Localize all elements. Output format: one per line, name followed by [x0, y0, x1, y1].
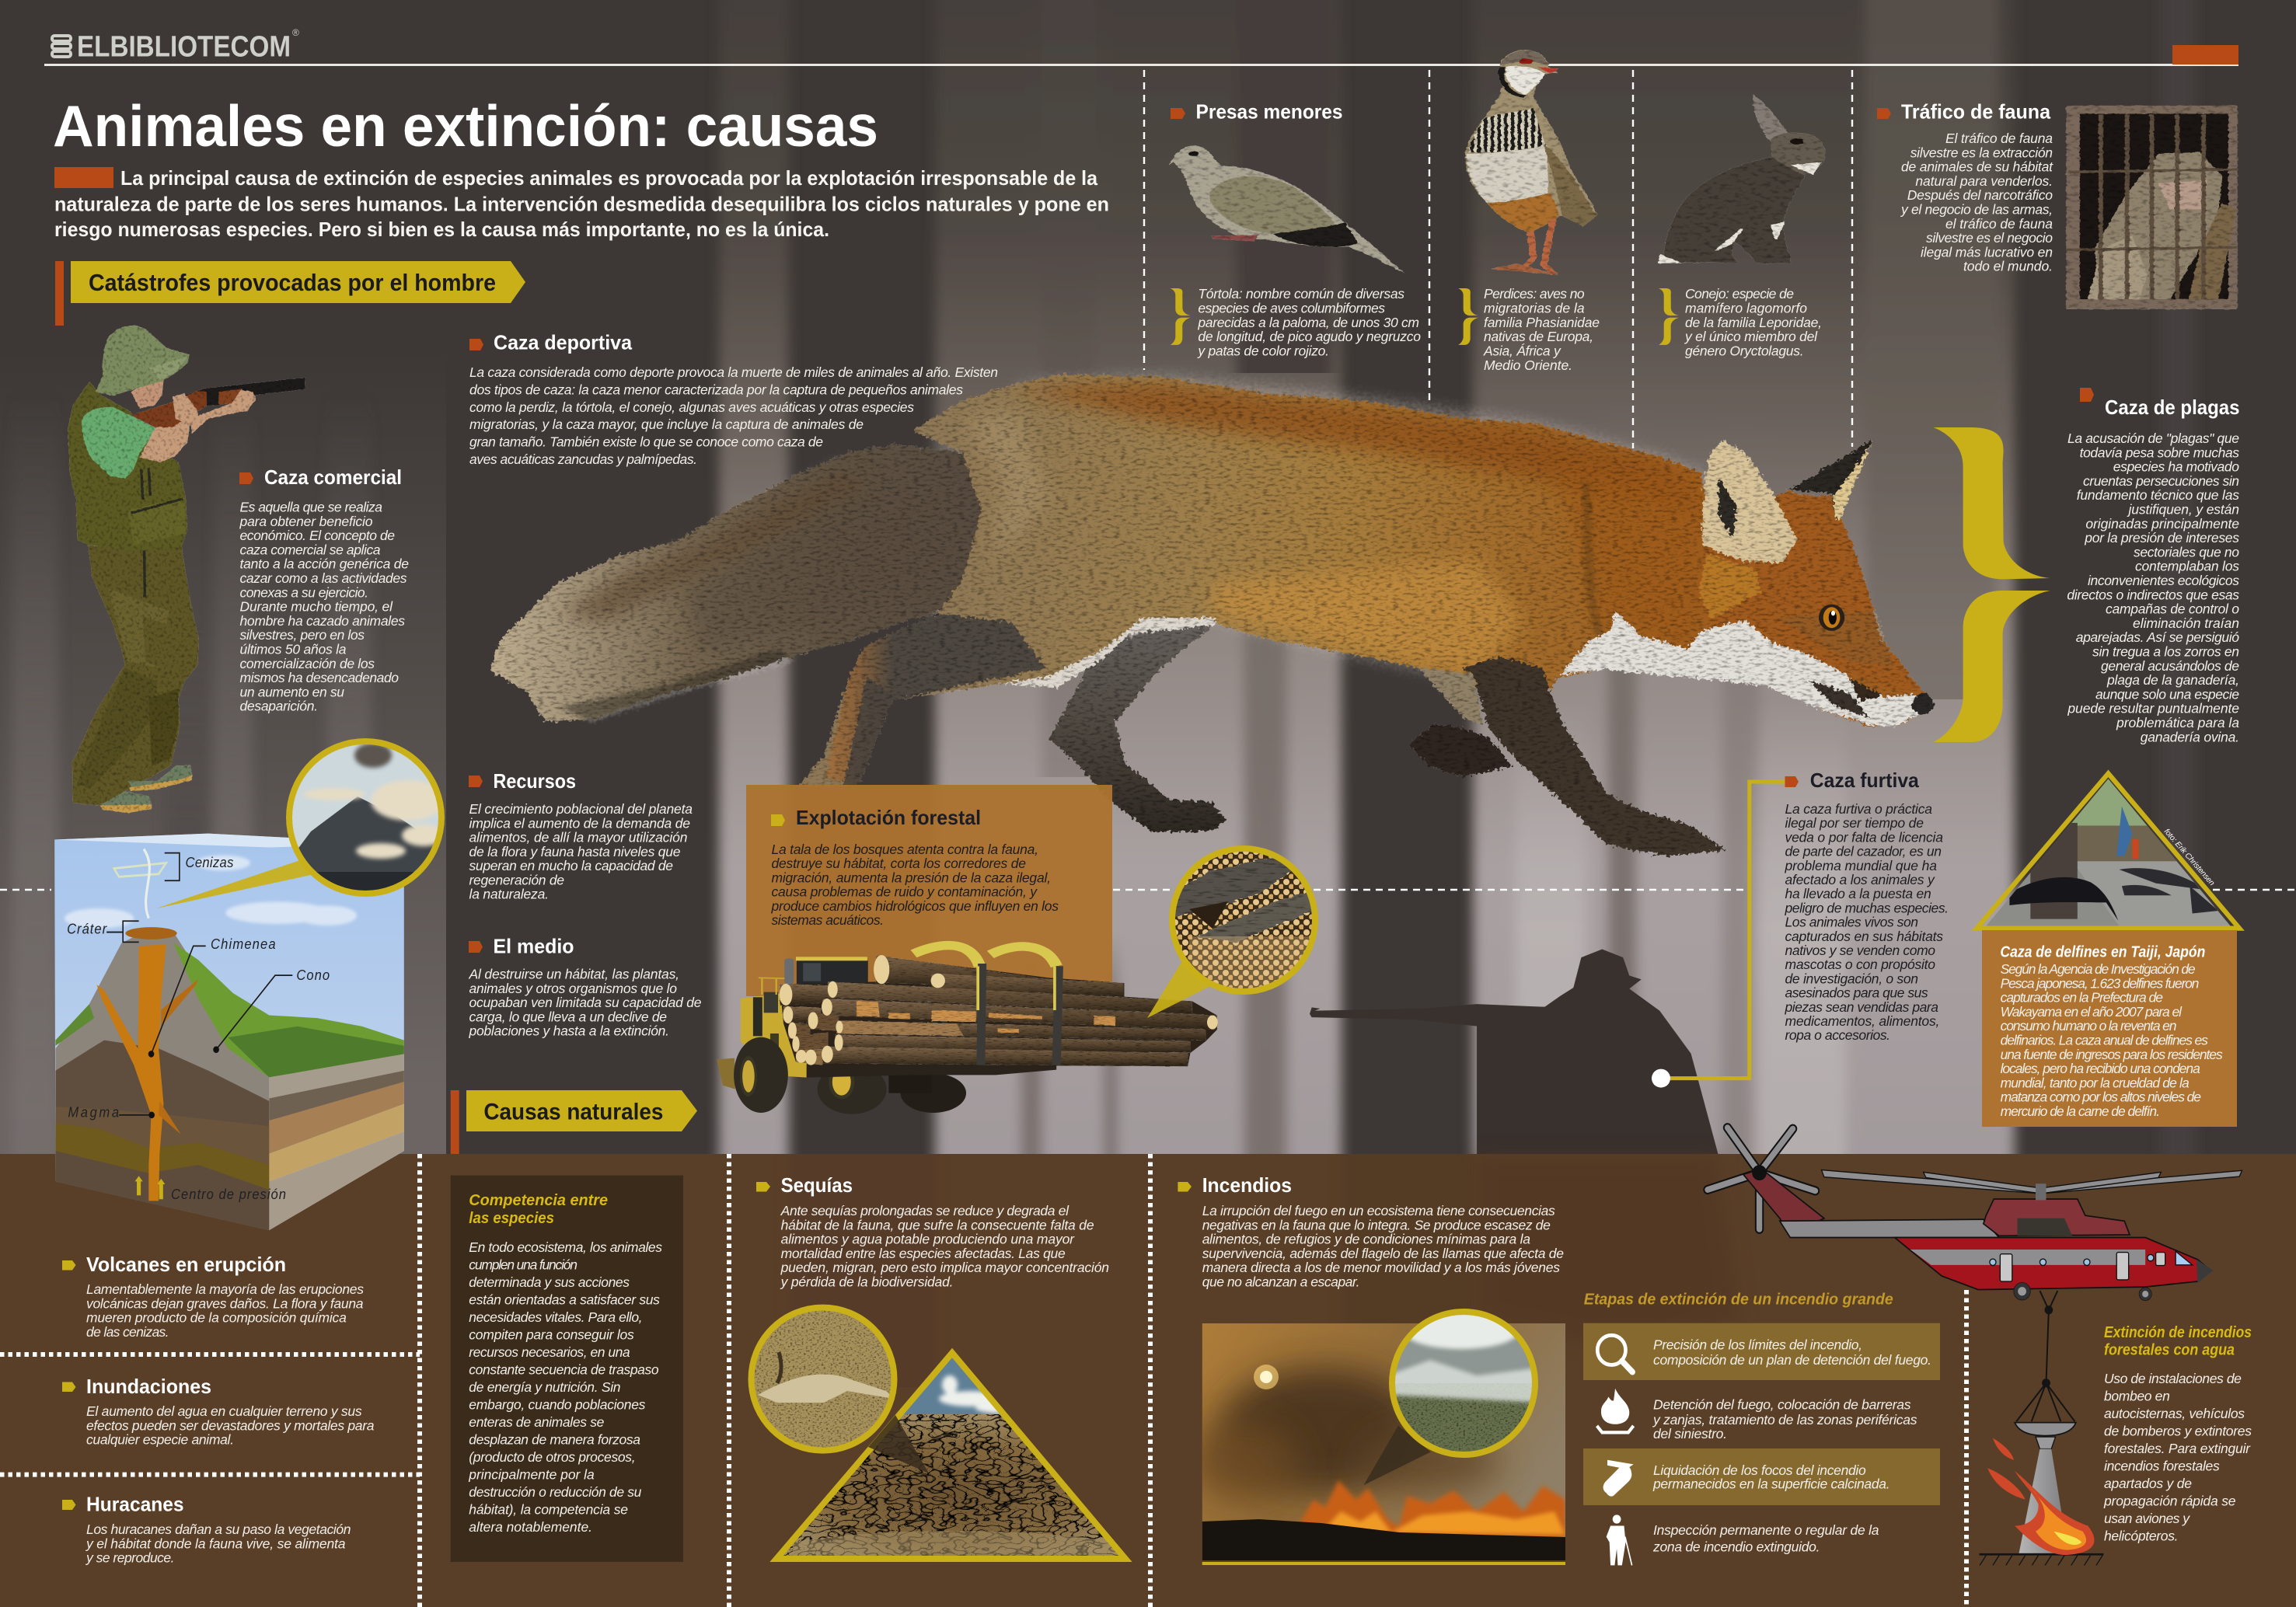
big yellow brace — [1934, 427, 2050, 742]
section: Caza deportiva — [469, 331, 998, 467]
section: Caza comercial: comercialización de los — [239, 656, 375, 671]
section: Caza comercial: silvestres, pero en los — [239, 627, 365, 643]
logo: ® — [292, 27, 299, 38]
section: Caza comercial: desaparición. — [239, 699, 318, 714]
section: El medio: carga, lo que lleva a un declive de — [469, 1009, 667, 1024]
panel: Competencia entre las especies: necesidades vitales. Para ello, — [469, 1309, 642, 1325]
volcano cross-section diagram: Chimenea — [211, 936, 276, 952]
panel: Competencia entre las especies: compiten para conseguir los — [469, 1327, 634, 1343]
section: Recursos: la naturaleza. — [469, 887, 549, 902]
section: Tráfico de fauna: y el negocio de las armas, — [1900, 202, 2053, 218]
caption: conejo: de la familia Leporidae, — [1685, 315, 1822, 330]
stage 2: fire containment: Detención del fuego, colocación de barreras — [1653, 1397, 1911, 1413]
section: Sequías — [756, 1173, 1109, 1290]
section: Recursos — [469, 769, 693, 902]
red fox — [491, 375, 1933, 856]
caption: conejo — [1659, 286, 1822, 359]
caption: tórtola: y patas de color rojizo. — [1197, 343, 1329, 359]
section: Extinción de incendios forestales con agua: forestales con agua — [2104, 1342, 2235, 1359]
panel: Competencia entre las especies: (producto de otros procesos, — [469, 1449, 636, 1465]
caption: conejo: Conejo: especie de — [1685, 286, 1794, 302]
section: Caza comercial: Caza comercial — [264, 465, 402, 489]
section: Tráfico de fauna: silvestre es el negocio — [1926, 230, 2053, 246]
section: Tráfico de fauna: natural para venderlos. — [1915, 173, 2053, 189]
stage 3: extinguisher: permanecidos en la superficie calcinada. — [1652, 1476, 1890, 1492]
section: Sequías: Sequías — [781, 1173, 853, 1197]
stage 2: fire containment: y zanjas, tratamiento de las zonas periféricas — [1652, 1412, 1917, 1427]
section: Caza furtiva with connector: medicamentos, alimentos, — [1785, 1013, 1939, 1029]
section: El medio: El medio — [493, 935, 574, 958]
intro text — [54, 166, 1109, 241]
section: Caza comercial: cazar como a las actividades — [239, 570, 407, 586]
panel: Caza de delfines en Taiji: capturados en la Prefectura de — [2001, 990, 2163, 1006]
section: Volcanes en erupción: Lamentablemente la mayoría de las erupciones — [86, 1281, 364, 1297]
dotted white dividers in lower section — [0, 1154, 1966, 1607]
section: Inundaciones: El aumento del agua en cualquier terreno y sus — [86, 1403, 362, 1419]
caption: perdices: familia Phasianidae — [1484, 315, 1600, 330]
section: Caza comercial: Durante mucho tiempo, el — [239, 599, 393, 615]
section: Caza furtiva with connector: Caza furtiva — [1810, 769, 1919, 792]
section: Caza de plagas: sin tregua a los zorros en — [2092, 643, 2239, 659]
section: Inundaciones — [62, 1375, 375, 1448]
panel: Explotación forestal: Explotación forestal — [796, 806, 981, 829]
section: Tráfico de fauna: Tráfico de fauna — [1901, 99, 2051, 123]
panel: Competencia entre las especies: principalmente por la — [468, 1467, 595, 1483]
caption: perdices — [1458, 286, 1600, 373]
section: Extinción de incendios forestales con agua: helicópteros. — [2104, 1528, 2178, 1543]
section: Huracanes: y se reproduce. — [85, 1550, 174, 1566]
water bucket — [1979, 1291, 2103, 1565]
section: Sequías: y pérdida de la biodiversidad. — [780, 1274, 953, 1290]
section: Caza de plagas: fundamento técnico que las — [2077, 487, 2239, 503]
caption: tórtola: especies de aves columbiformes — [1198, 300, 1385, 315]
panel: Caza de delfines en Taiji: Según la Agencia de Investigación de — [2001, 961, 2196, 977]
section: Inundaciones: efectos pueden ser devastadores y mortales para — [86, 1417, 375, 1433]
caption: perdices: Asia, África y — [1483, 343, 1561, 359]
volcano cross-section diagram — [54, 834, 404, 1230]
section: Recursos: de la flora y fauna hasta niveles que — [469, 844, 681, 859]
section: Caza deportiva: Caza deportiva — [494, 331, 633, 354]
inset photo: burned hillside — [1387, 1309, 1540, 1458]
section: Tráfico de fauna: todo el mundo. — [1963, 259, 2053, 274]
caption: conejo: género Oryctolagus. — [1685, 343, 1804, 359]
stage 1: magnifier: composición de un plan de detención del fuego. — [1653, 1352, 1931, 1368]
section: Tráfico de fauna — [1877, 99, 2053, 274]
section: Recursos: alimentos, de allí la mayor utilización — [469, 830, 687, 845]
stage 4: inspector — [1607, 1515, 1879, 1565]
title: Animales en extinción: causas — [53, 93, 878, 159]
section: Caza de plagas: todavía pesa sobre muchas — [2080, 444, 2239, 460]
panel: Competencia entre las especies: constante secuencia de traspaso — [469, 1361, 659, 1377]
volcano cross-section diagram: Magma — [68, 1104, 119, 1121]
caption: conejo: y el único miembro del — [1684, 329, 1818, 344]
panel: Explotación forestal: migración, aumenta la presión de la caza ilegal, — [771, 870, 1051, 885]
banner: Catástrofes provocadas por el hombre: Catástrofes provocadas por el hombre — [89, 269, 496, 296]
volcano cross-section diagram: Cenizas — [186, 854, 234, 870]
section: Caza de plagas: aparejadas. Así se persiguió — [2076, 629, 2239, 645]
section: Caza comercial: caza comercial se aplica — [239, 542, 381, 557]
hunter with shotgun — [68, 326, 305, 813]
section: Sequías: hábitat de la fauna, que sufre la consecuente falta de — [781, 1217, 1094, 1232]
section: Caza furtiva with connector: mascotas o con propósito — [1785, 957, 1935, 972]
section: El medio: ocupaban ven limitada su capacidad de — [469, 995, 702, 1010]
section: Caza deportiva: como la perdiz, la tórtola, el conejo, algunas aves acuáticas y otras especies — [469, 399, 914, 415]
panel: Caza de delfines en Taiji: locales, pero ha recibido una condena — [2001, 1061, 2200, 1076]
caption: perdices: migratorias de la — [1484, 300, 1585, 315]
section: Extinción de incendios forestales con agua: Extinción de incendios — [2104, 1324, 2252, 1341]
section: Caza comercial: Es aquella que se realiza — [239, 499, 382, 514]
log bundle — [780, 955, 1218, 1066]
section: Tráfico de fauna: Después del narcotráfico — [1907, 187, 2053, 203]
ground band: brown lower section — [0, 1154, 2296, 1607]
section: Caza de plagas: por la presión de intereses — [2084, 530, 2239, 546]
volcano cross-section diagram: Centro de presión — [171, 1186, 286, 1202]
section: Caza furtiva with connector — [1652, 769, 1949, 1088]
volcano cross-section diagram: Cono — [296, 967, 330, 983]
section: Caza furtiva with connector: capturados en sus hábitats — [1785, 929, 1943, 944]
panel: Caza de delfines en Taiji: Caza de delfines en Taiji, Japón — [2000, 943, 2205, 960]
panel: Competencia entre las especies: desplazan de manera forzosa — [469, 1431, 640, 1447]
section: Incendios: La irrupción del fuego en un ecosistema tiene consecuencias — [1202, 1203, 1555, 1218]
section: Huracanes: Huracanes — [86, 1493, 184, 1516]
section: Recursos: superan en mucho la capacidad de — [469, 858, 673, 873]
stage 4: inspector: zona de incendio extinguido. — [1652, 1539, 1820, 1555]
panel: Caza de delfines en Taiji: delfinarios. La caza anual de delfines es — [2001, 1032, 2208, 1048]
stage 2: fire containment — [1597, 1389, 1917, 1441]
banner: Catástrofes provocadas por el hombre — [55, 261, 525, 326]
dashed horizontal divider — [0, 889, 2296, 891]
section: Extinción de incendios forestales con agua: bombeo en — [2104, 1388, 2170, 1403]
section: Caza comercial: tanto a la acción genérica de — [239, 556, 409, 572]
volcano cross-section diagram: Cráter — [67, 921, 107, 937]
section: Caza de plagas: cruentas persecuciones sin — [2083, 473, 2239, 489]
section: Caza furtiva with connector: ilegal por ser tiempo de — [1785, 815, 1924, 831]
photo: cracked earth triangle — [776, 1352, 1127, 1559]
section: Caza furtiva with connector: nativos y se venden como — [1785, 943, 1935, 958]
panel: Explotación forestal: produce cambios hidrológicos que influyen en los — [771, 898, 1059, 914]
section: Volcanes en erupción: de las cenizas. — [86, 1324, 169, 1340]
section: Caza de plagas: plaga de la ganadería, — [2106, 672, 2239, 688]
panel: Competencia entre las especies — [451, 1176, 683, 1562]
section: Tráfico de fauna: de animales de su hábitat — [1901, 159, 2053, 175]
section: Caza furtiva with connector: asesinados para que sus — [1785, 985, 1928, 1001]
panel: Competencia entre las especies: En todo ecosistema, los animales — [469, 1239, 662, 1255]
section: Volcanes en erupción: mueren producto de la composición química — [86, 1310, 347, 1326]
banner: Causas naturales: Causas naturales — [483, 1100, 663, 1125]
section: Volcanes en erupción: Volcanes en erupción — [86, 1253, 286, 1276]
panel: Competencia entre las especies: enteras de animales se — [469, 1414, 605, 1430]
section: Caza de plagas: directos o indirectos que esas — [2067, 587, 2239, 602]
panel: Competencia entre las especies: embargo, cuando poblaciones — [469, 1397, 646, 1413]
panel: Competencia entre las especies: las especies — [469, 1210, 554, 1227]
section: Caza de plagas: problemática para la — [2116, 715, 2239, 730]
section: El medio: animales y otros organismos que lo — [469, 981, 677, 996]
section: Caza de plagas: justifiquen, y están — [2127, 502, 2239, 518]
section: Caza de plagas: contemplaban los — [2135, 559, 2239, 574]
section: Incendios: alimentos, de refugios y de condiciones mínimas para la — [1202, 1232, 1530, 1247]
heading: Etapas de extinción: Etapas de extinción de un incendio grande — [1584, 1292, 1893, 1309]
section: El medio — [468, 935, 702, 1039]
section: Incendios: que no alcanzan a escapar. — [1202, 1274, 1360, 1290]
tail rotor — [1708, 1128, 1815, 1229]
section: Caza deportiva: migratorias, y la caza mayor, que incluye la captura de animales de — [469, 417, 864, 432]
section: Caza furtiva with connector: Los animales vivos son — [1785, 915, 1918, 930]
panel: Competencia entre las especies: cumplen una función — [469, 1257, 577, 1273]
section: Incendios — [1178, 1173, 1564, 1290]
section: Caza deportiva: aves acuáticas zancudas y palmípedas. — [469, 451, 697, 467]
section: Extinción de incendios forestales con agua: Uso de instalaciones de — [2104, 1371, 2242, 1386]
banner: Causas naturales — [451, 1090, 697, 1154]
helicopter carrying water bucket — [1708, 1128, 2242, 1565]
section: Caza de plagas: eliminación traían — [2133, 615, 2239, 631]
section: Caza furtiva with connector: ropa o accesorios. — [1785, 1027, 1890, 1043]
section: Caza deportiva: dos tipos de caza: la caza menor caracterizada por la captura de pequeños animales — [469, 382, 963, 397]
logging truck — [717, 946, 1218, 1114]
intro text: riesgo numerosas especies. Pero si bien es la causa más importante, no es la única. — [54, 218, 829, 241]
section: Caza furtiva with connector: La caza furtiva o práctica — [1785, 801, 1932, 817]
grapple stakes — [914, 946, 1059, 1065]
header rule with orange tab — [44, 45, 2238, 66]
panel: Competencia entre las especies: altera notablemente. — [469, 1519, 592, 1535]
panel: Caza de delfines en Taiji: matanza como por los altos niveles de — [2001, 1089, 2201, 1105]
panel: Caza de delfines en Taiji: consumo humano o la reventa en — [2001, 1018, 2176, 1034]
section: Caza comercial: económico. El concepto de — [239, 528, 395, 543]
section: Incendios: supervivencia, además del flagelo de las llamas que afecta de — [1202, 1246, 1564, 1261]
section: Caza de plagas: La acusación de "plagas" que — [2067, 431, 2239, 446]
stage 3: extinguisher: Liquidación de los focos del incendio — [1653, 1462, 1866, 1478]
section: Incendios: Incendios — [1202, 1173, 1292, 1197]
flames — [1987, 1438, 2095, 1555]
section: Caza de plagas: campañas de control o — [2106, 601, 2239, 617]
truck body and wheels — [717, 957, 1056, 1114]
panel: Caza de delfines en Taiji: mercurio de la carne de delfín. — [2001, 1103, 2160, 1119]
section: Caza de plagas — [2067, 388, 2240, 744]
section: Caza de plagas: ganadería ovina. — [2141, 729, 2239, 744]
caption: perdices: nativas de Europa, — [1484, 329, 1593, 344]
panel: Caza de delfines en Taiji: Wakayama en el año 2007 para el — [2001, 1004, 2183, 1020]
panel: Competencia entre las especies: de energía y nutrición. Sin — [469, 1379, 620, 1395]
section: Inundaciones: Inundaciones — [86, 1375, 211, 1398]
section: Caza de plagas: sectoriales que no — [2134, 544, 2239, 559]
stage 1: magnifier — [1583, 1323, 1940, 1380]
photo: caged monkey — [2066, 106, 2238, 309]
intro text: La principal causa de extinción de especies animales es provocada por la explotación irresponsable de la — [120, 166, 1098, 190]
section: Caza comercial: conexas a su ejercicio. — [239, 584, 368, 600]
icon: fox eye — [1819, 605, 1844, 631]
stage 2: fire containment: del siniestro. — [1653, 1426, 1727, 1441]
section: Caza furtiva with connector: piezas sean vendidas para — [1785, 999, 1938, 1015]
section: Extinción de incendios forestales con agua: usan aviones y — [2104, 1511, 2190, 1526]
panel: Explotación forestal: sistemas acuáticos. — [771, 912, 884, 928]
section: Volcanes en erupción — [62, 1253, 364, 1340]
section: Caza furtiva with connector: veda o por falta de licencia — [1785, 829, 1943, 845]
section: Sequías: pueden, migran, pero esto implica mayor concentración — [780, 1260, 1109, 1275]
section: Recursos: regeneración de — [469, 872, 564, 887]
section: El medio: poblaciones y hasta a la extinción. — [468, 1023, 669, 1039]
section: Caza comercial: últimos 50 años la — [239, 642, 347, 657]
section: Caza de plagas: inconvenientes ecológicos — [2088, 573, 2239, 588]
inset photo: dead cattle — [746, 1305, 902, 1453]
section: Extinción de incendios forestales con agua: de bomberos y extintores — [2104, 1423, 2252, 1438]
section: Incendios: negativas en la fauna que lo integra. Se produce escasez de — [1202, 1217, 1551, 1232]
section: Caza furtiva with connector: peligro de muchas especies. — [1785, 900, 1949, 915]
section: Caza furtiva with connector: de investigación, o son — [1785, 971, 1918, 986]
section: Recursos: Recursos — [493, 769, 576, 793]
caption: tórtola: Tórtola: nombre común de diversas — [1198, 286, 1404, 302]
caption: tórtola: de longitud, de pico agudo y negruzco — [1198, 329, 1421, 344]
section: Extinción de incendios forestales con agua: forestales. Para extinguir — [2104, 1441, 2251, 1456]
panel: Explotación forestal: destruye su hábitat, corta los corredores de — [771, 856, 1026, 871]
section: Caza deportiva: La caza considerada como deporte provoca la muerte de miles de animales al año. Existen — [469, 364, 998, 380]
section: Caza de plagas: puede resultar puntualmente — [2067, 701, 2239, 716]
panel: Competencia entre las especies: recursos necesarios, en una — [469, 1344, 630, 1360]
section: Recursos: implica el aumento de la demanda de — [469, 815, 690, 831]
intro text: naturaleza de parte de los seres humanos. La intervención desmedida desequilibra los ciclos naturales y pone en — [54, 193, 1109, 216]
section: Caza furtiva with connector: problema mundial que ha — [1785, 858, 1937, 873]
caption: perdices: Medio Oriente. — [1484, 357, 1572, 373]
animal: perdiz — [1465, 50, 1596, 275]
section: Sequías: mortalidad entre las especies afectadas. Las que — [781, 1246, 1066, 1261]
section: Tráfico de fauna: El tráfico de fauna — [1945, 131, 2053, 146]
section: Caza de plagas: Caza de plagas — [2105, 396, 2240, 419]
section: El medio: Al destruirse un hábitat, las plantas, — [468, 967, 679, 982]
panel: Caza de delfines en Taiji: mundial, tanto por la crueldad de la — [2001, 1075, 2190, 1090]
panel: Caza de delfines en Taiji — [1982, 930, 2237, 1127]
caption: perdices: Perdices: aves no — [1484, 286, 1585, 302]
section: Huracanes — [62, 1493, 351, 1566]
photo: dolphin hunt triangle — [1977, 773, 2239, 930]
inset photo: stacked logs — [1170, 847, 1321, 999]
panel: Competencia entre las especies: destrucción o reducción de su — [469, 1484, 642, 1500]
section: Extinción de incendios forestales con agua: apartados y de — [2104, 1476, 2192, 1491]
panel: Competencia entre las especies: Competencia entre — [469, 1192, 608, 1209]
section: Caza comercial — [239, 465, 409, 714]
panel: Explotación forestal: La tala de los bosques atenta contra la fauna, — [771, 842, 1038, 857]
pointer to logs inset — [1147, 960, 1210, 1018]
inset photo: erupting volcano — [156, 738, 445, 908]
stage 1: magnifier: Precisión de los límites del incendio, — [1653, 1337, 1862, 1353]
section: Caza furtiva with connector: de parte del cazador, es un — [1785, 844, 1942, 859]
animal: conejo — [1659, 95, 1826, 263]
section: Caza furtiva with connector: afectado a los animales y — [1785, 872, 1935, 887]
section: Caza deportiva: gran tamaño. También existe lo que se conoce como caza de — [469, 434, 823, 450]
section: Tráfico de fauna: el tráfico de fauna — [1945, 216, 2053, 232]
section: Caza comercial: para obtener beneficio — [239, 514, 373, 529]
photo: dolphin hunt triangle: foto: Erik Christensen — [2162, 828, 2216, 887]
dashed vertical dividers — [1144, 70, 1852, 448]
logo: ELBIBLIOTECOM — [77, 31, 291, 64]
stage 3: extinguisher — [1583, 1448, 1940, 1505]
section: Incendios: manera directa a los de menor movilidad y a los más jóvenes — [1202, 1260, 1560, 1275]
section: Huracanes: y el hábitat donde la fauna vive, se alimenta — [85, 1536, 346, 1551]
caption: tórtola: parecidas a la paloma, de unos 30 cm — [1197, 315, 1419, 330]
section: Volcanes en erupción: volcánicas dejan graves daños. La flora y fauna — [86, 1295, 364, 1311]
section: Extinción de incendios forestales con agua — [2103, 1324, 2252, 1543]
panel: Explotación forestal — [746, 785, 1112, 996]
section: Sequías: alimentos y agua potable produciendo una mayor — [781, 1232, 1075, 1247]
section: Extinción de incendios forestales con agua: propagación rápida se — [2103, 1493, 2236, 1508]
photo: forest fire — [1189, 1323, 1565, 1565]
section: Caza comercial: un aumento en su — [239, 684, 344, 699]
section: Caza de plagas: aunque solo una especie — [2095, 686, 2239, 702]
section: Caza comercial: mismos ha desencadenado — [239, 670, 399, 685]
background: misty forest — [0, 0, 2296, 1154]
section: Tráfico de fauna: silvestre es la extracción — [1910, 145, 2053, 160]
section: Sequías: Ante sequías prolongadas se reduce y degrada el — [780, 1203, 1069, 1218]
section: Tráfico de fauna: ilegal más lucrativo en — [1921, 244, 2053, 260]
panel: Caza de delfines en Taiji: Pesca japonesa, 1.623 delfines fueron — [2001, 975, 2199, 991]
panel: Caza de delfines en Taiji: una fuente de ingresos para los residentes — [2001, 1047, 2223, 1062]
main rotor — [1822, 1170, 2242, 1194]
section: Huracanes: Los huracanes dañan a su paso la vegetación — [86, 1522, 351, 1537]
caption: conejo: mamífero lagomorfo — [1685, 300, 1807, 315]
section: Presas menores heading: Presas menores — [1195, 99, 1343, 123]
hunter silhouette — [1310, 949, 1718, 1154]
panel: Competencia entre las especies: están orientadas a satisfacer sus — [469, 1292, 660, 1307]
section: Extinción de incendios forestales con agua: incendios forestales — [2104, 1458, 2220, 1473]
panel: Explotación forestal: causa problemas de ruido y contaminación, y — [771, 884, 1038, 900]
section: Inundaciones: cualquier especie animal. — [86, 1432, 234, 1448]
section: Caza de plagas: originadas principalmente — [2085, 516, 2239, 532]
caption: tórtola — [1171, 286, 1421, 359]
section: Recursos: El crecimiento poblacional del planeta — [469, 801, 693, 817]
section: Extinción de incendios forestales con agua: autocisternas, vehículos — [2104, 1406, 2245, 1421]
section: Caza de plagas: general acusándolos de — [2101, 658, 2239, 674]
section: Caza comercial: hombre ha cazado animales — [239, 613, 405, 629]
panel: Competencia entre las especies: determinada y sus acciones — [469, 1274, 630, 1290]
animal: tórtola — [1169, 145, 1404, 273]
section: Caza de plagas: especies ha motivado — [2113, 459, 2239, 475]
stage 4: inspector: Inspección permanente o regular de la — [1653, 1522, 1879, 1538]
section: Caza furtiva with connector: ha llevado a la puesta en — [1785, 886, 1931, 901]
panel: Competencia entre las especies: hábitat), la competencia se — [469, 1501, 628, 1517]
